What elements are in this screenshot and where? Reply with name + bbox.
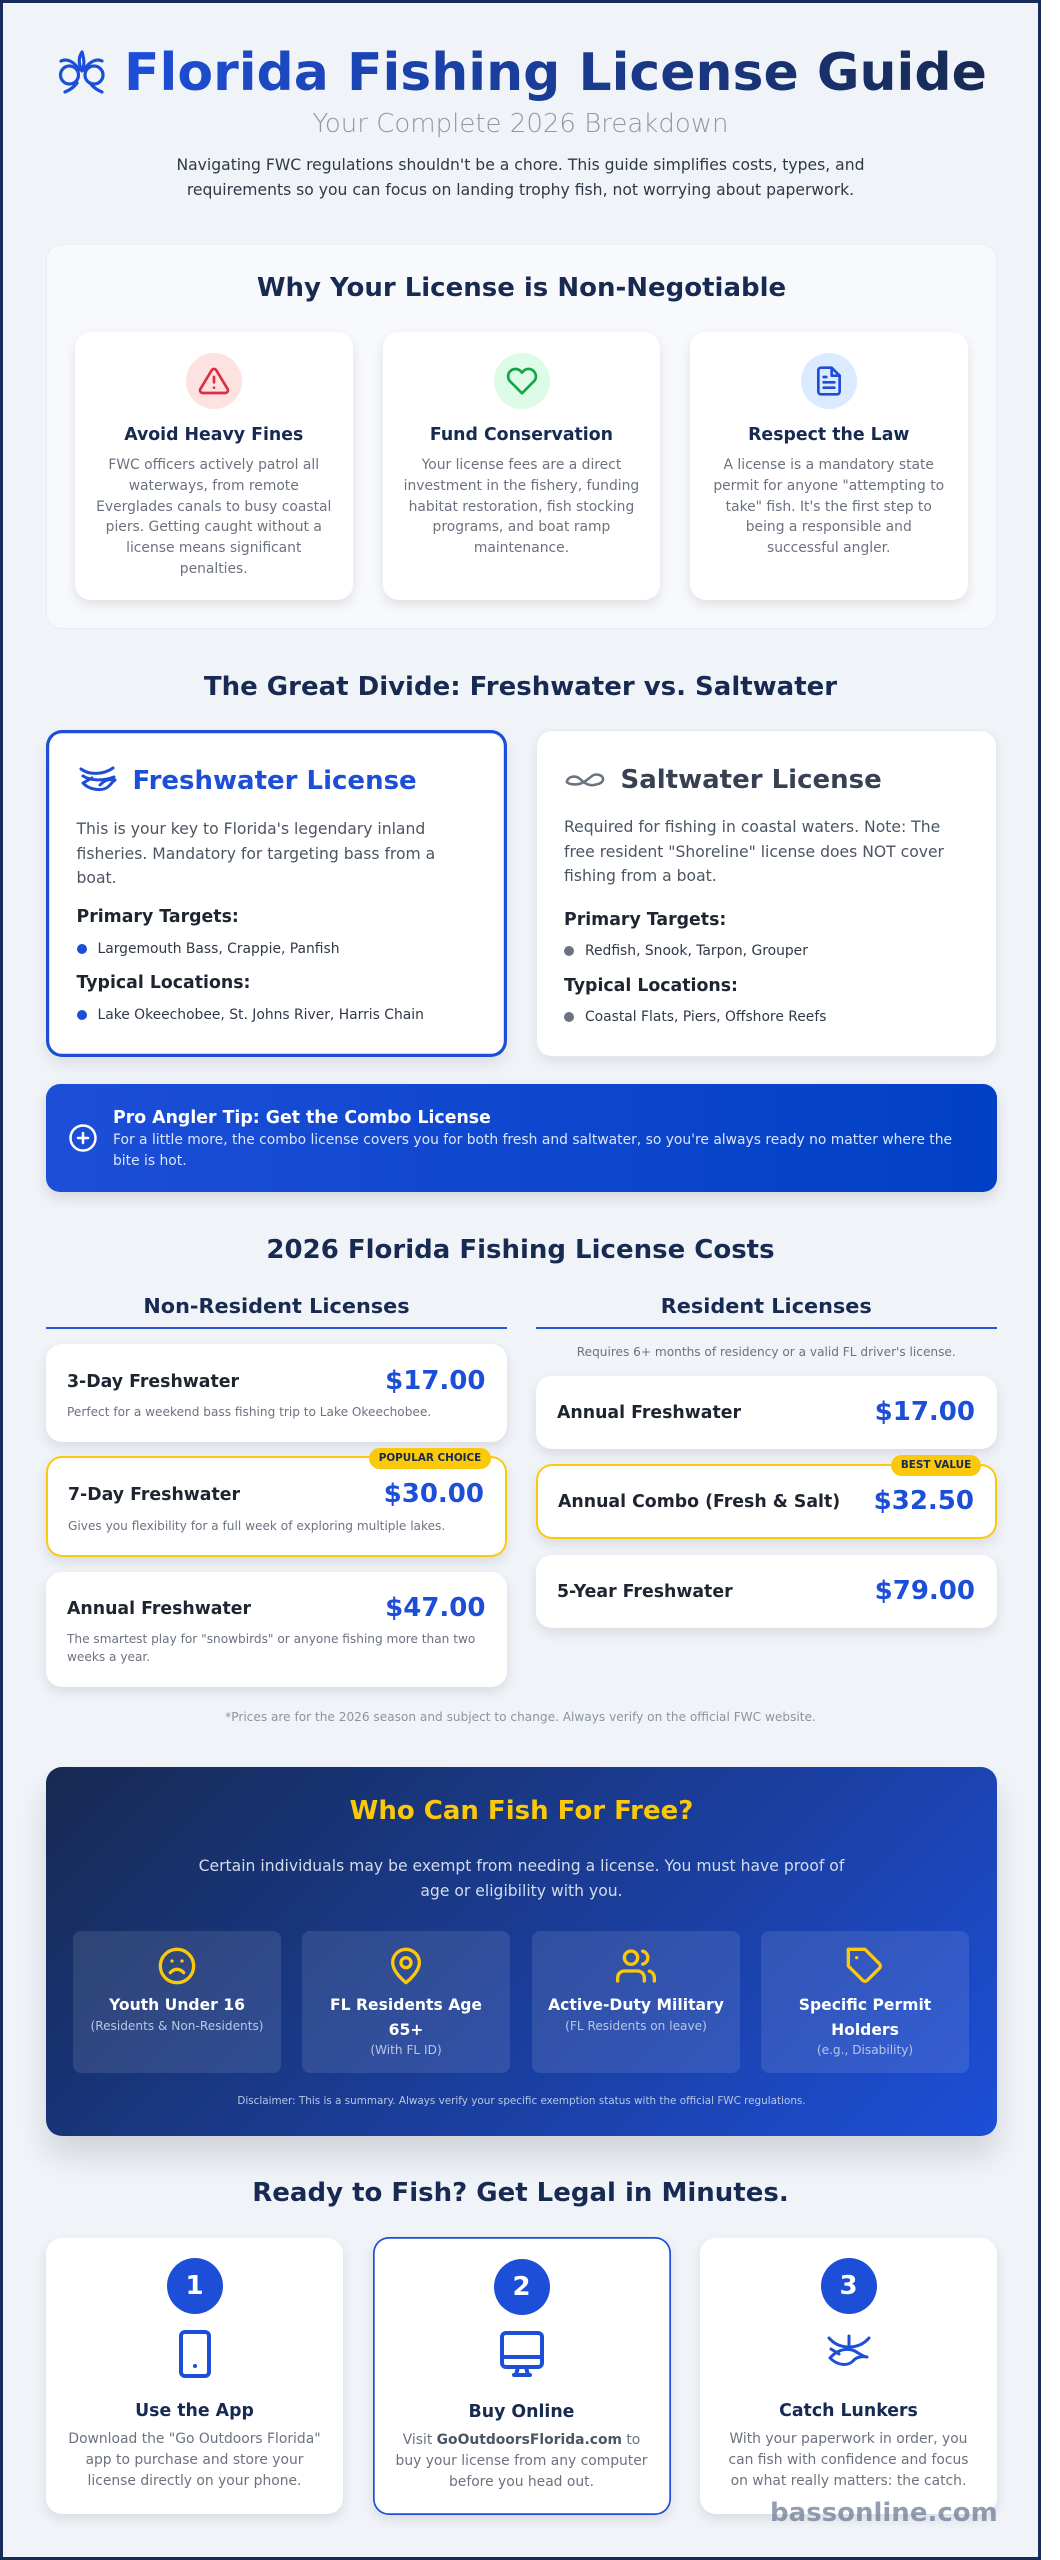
item title: FL Residents Age	[330, 1996, 482, 2014]
icon: plus circle	[69, 1124, 97, 1152]
card text: penalties.	[180, 561, 248, 577]
typical locations label: Typical Locations:	[76, 973, 250, 993]
step text: license directly on your phone.	[88, 2473, 301, 2489]
card text: piers. Getting caught without a	[106, 519, 322, 535]
price card: 5-year	[536, 1555, 997, 1628]
price: $17.00	[385, 1366, 486, 1396]
price card: annual	[536, 1376, 997, 1449]
intro text	[176, 156, 865, 199]
item note: (e.g., Disability)	[817, 2043, 913, 2057]
step number: 2	[512, 2272, 531, 2302]
step number	[494, 2259, 550, 2315]
panel: saltwater license	[536, 730, 997, 1057]
step text	[728, 2431, 968, 2489]
panel intro: age or eligibility with you.	[420, 1882, 623, 1900]
step text: before you head out.	[449, 2474, 594, 2490]
panel: who can fish for free	[46, 1767, 997, 2136]
card text: investment in the fishery, funding	[404, 478, 639, 494]
description	[66, 1632, 475, 1664]
targets list: Redfish, Snook, Tarpon, Grouper	[585, 943, 808, 959]
badge	[369, 1448, 491, 1469]
step number: 3	[839, 2271, 858, 2301]
card title: Respect the Law	[748, 425, 909, 445]
card text: waterways, from remote	[129, 478, 299, 494]
step title: Use the App	[135, 2401, 254, 2421]
item title: Youth Under 16	[109, 1996, 245, 2014]
icon: face	[158, 1948, 196, 1984]
price: $30.00	[384, 1479, 484, 1509]
callout: pro angler tip	[46, 1084, 997, 1192]
card: respect the law	[690, 332, 968, 600]
description	[76, 820, 435, 887]
panel intro	[199, 1857, 845, 1900]
panel intro: Certain individuals may be exempt from needing a license. You must have proof of	[199, 1857, 844, 1875]
badge: BEST VALUE	[901, 1459, 971, 1471]
disclaimer: Disclaimer: This is a summary. Always verify your specific exemption status with the official FWC regulations.	[237, 2095, 806, 2107]
card text: A license is a mandatory state	[724, 457, 934, 473]
bullet dot	[564, 946, 574, 956]
step number	[820, 2258, 876, 2314]
card text: being a responsible and	[746, 519, 912, 535]
description: This is your key to Florida's legendary inland	[76, 820, 425, 838]
step title: Catch Lunkers	[779, 2401, 918, 2421]
item note: (With FL ID)	[370, 2043, 442, 2057]
panel: freshwater license	[46, 730, 507, 1057]
badge	[891, 1455, 981, 1476]
bullet dot	[77, 1010, 87, 1020]
price: $32.50	[874, 1486, 974, 1516]
card text: license means significant	[126, 540, 301, 556]
panel: why your license is non-negotiable	[46, 244, 997, 629]
subtitle: Your Complete 2026 Breakdown	[312, 109, 729, 139]
heading: ready to fish: Ready to Fish? Get Legal in Minutes.	[252, 2178, 789, 2208]
card title: Avoid Heavy Fines	[124, 425, 303, 445]
step text	[68, 2431, 321, 2489]
underline	[46, 1327, 507, 1329]
step number: 1	[185, 2271, 204, 2301]
primary targets label: Primary Targets:	[76, 907, 239, 927]
bullet dot	[77, 944, 87, 954]
step title: Buy Online	[469, 2402, 574, 2422]
icon: tag	[846, 1948, 882, 1983]
name: 5-Year Freshwater	[557, 1582, 733, 1602]
card text: Everglades canals to busy coastal	[96, 499, 331, 515]
description: Perfect for a weekend bass fishing trip to Lake Okeechobee.	[67, 1405, 431, 1419]
column: non-resident licenses	[44, 1294, 510, 1694]
targets list: Largemouth Bass, Crappie, Panfish	[98, 941, 340, 957]
residency note: Requires 6+ months of residency or a valid FL driver's license.	[577, 1345, 956, 1359]
card text: take" fish. It's the first step to	[726, 499, 932, 515]
locations list: Lake Okeechobee, St. Johns River, Harris Chain	[98, 1007, 424, 1023]
title: Florida Fishing License Guide	[124, 43, 987, 103]
item note: (FL Residents on leave)	[565, 2019, 707, 2033]
price card: annual combo	[536, 1464, 997, 1539]
bullet dot	[564, 1012, 574, 1022]
name: Annual Freshwater	[67, 1599, 251, 1619]
icon: freshwater fish	[79, 766, 117, 792]
item title	[799, 1996, 931, 2039]
step 2: buy online	[372, 2237, 670, 2515]
column heading: Non-Resident Licenses	[143, 1294, 410, 1318]
icon: fish logo	[58, 50, 105, 94]
primary targets label: Primary Targets:	[564, 910, 726, 930]
description	[564, 818, 944, 885]
description: Gives you flexibility for a full week of exploring multiple lakes.	[68, 1519, 445, 1533]
card text	[404, 457, 639, 556]
icon: computer	[500, 2331, 544, 2377]
locations list: Coastal Flats, Piers, Offshore Reefs	[585, 1009, 826, 1025]
badge: POPULAR CHOICE	[379, 1452, 481, 1464]
step text: on what really matters: the catch.	[731, 2473, 966, 2489]
description: The smartest play for "snowbirds" or anyone fishing more than two	[67, 1632, 475, 1646]
card text	[713, 457, 944, 556]
item title: Active-Duty Military	[548, 1996, 724, 2014]
card text: Your license fees are a direct	[422, 457, 621, 473]
price: $79.00	[875, 1576, 975, 1606]
name: 3-Day Freshwater	[67, 1372, 239, 1392]
item title: Holders	[831, 2021, 899, 2039]
typical locations label: Typical Locations:	[564, 976, 738, 996]
step text: app to purchase and store your	[86, 2452, 303, 2468]
item: youth	[73, 1931, 281, 2073]
card: fund conservation	[383, 332, 660, 600]
footnote: *Prices are for the 2026 season and subject to change. Always verify on the official FWC website.	[225, 1710, 816, 1724]
heading: license costs: 2026 Florida Fishing License Costs	[266, 1235, 775, 1265]
icon: location pin	[391, 1948, 421, 1984]
price: $17.00	[875, 1397, 975, 1427]
icon: phone	[179, 2330, 211, 2378]
card text: maintenance.	[474, 540, 569, 556]
price card: 7-day popular	[46, 1456, 507, 1557]
item title: 65+	[389, 2021, 423, 2039]
item: permit holders	[761, 1931, 969, 2073]
name: Annual Freshwater	[557, 1403, 741, 1423]
panel heading: Who Can Fish For Free?	[350, 1796, 693, 1826]
name: Annual Combo (Fresh & Salt)	[558, 1492, 840, 1512]
icon: people	[616, 1949, 656, 1983]
icon: warning	[186, 353, 242, 409]
panel title: Freshwater License	[132, 766, 417, 796]
step 1: use the app	[46, 2238, 343, 2514]
column: resident licenses	[534, 1294, 1000, 1636]
price: $47.00	[385, 1593, 486, 1623]
card text	[96, 457, 331, 577]
description: free resident "Shoreline" license does NOT cover	[564, 842, 944, 860]
price card: 3-day	[46, 1344, 507, 1442]
step text: Download the "Go Outdoors Florida"	[68, 2431, 321, 2447]
column heading: Resident Licenses	[661, 1294, 872, 1318]
card: avoid heavy fines	[75, 332, 352, 600]
item: military	[532, 1931, 740, 2073]
intro text: requirements so you can focus on landing trophy fish, not worrying about paperwork.	[187, 181, 854, 199]
card text: habitat restoration, fish stocking	[409, 499, 634, 515]
card text: FWC officers actively patrol all	[108, 457, 319, 473]
step number	[166, 2258, 222, 2314]
card text: programs, and boat ramp	[433, 519, 610, 535]
watermark: bassonline.com	[770, 2498, 998, 2528]
card title: Fund Conservation	[430, 425, 613, 445]
icon: document	[801, 353, 857, 409]
heading: Why Your License is Non-Negotiable	[257, 273, 786, 303]
tip text: For a little more, the combo license covers you for both fresh and saltwater, so you're always ready no matter where the	[113, 1132, 952, 1148]
card text: successful angler.	[767, 540, 890, 556]
tip text	[113, 1132, 952, 1169]
step text: With your paperwork in order, you	[730, 2431, 967, 2447]
item title: Specific Permit	[799, 1996, 931, 2014]
step 3: catch lunkers	[700, 2238, 997, 2514]
icon: heart	[494, 353, 550, 409]
heading: the great divide: The Great Divide: Freshwater vs. Saltwater	[204, 672, 837, 702]
item title	[330, 1996, 482, 2039]
item: seniors	[302, 1931, 510, 2073]
description: fishing from a boat.	[564, 867, 717, 885]
step text	[396, 2432, 648, 2490]
intro text: Navigating FWC regulations shouldn't be a chore. This guide simplifies costs, types, and	[176, 156, 865, 174]
name: 7-Day Freshwater	[68, 1485, 240, 1505]
step text: can fish with confidence and focus	[728, 2452, 968, 2468]
step text: buy your license from any computer	[396, 2453, 647, 2469]
card text: permit for anyone "attempting to	[713, 478, 944, 494]
tip text: bite is hot.	[113, 1153, 187, 1169]
tip title: Pro Angler Tip: Get the Combo License	[113, 1108, 491, 1128]
description: weeks a year.	[67, 1650, 150, 1664]
description: boat.	[76, 869, 117, 887]
description: fisheries. Mandatory for targeting bass from a	[76, 844, 435, 862]
icon: fish	[827, 2334, 871, 2366]
panel title: Saltwater License	[620, 765, 882, 795]
price card: annual	[46, 1572, 507, 1687]
step text: Visit GoOutdoorsFlorida.com to	[403, 2432, 640, 2448]
icon: saltwater wave	[566, 773, 604, 786]
description: Required for fishing in coastal waters. Note: The	[564, 818, 940, 836]
underline	[536, 1327, 997, 1329]
item note: (Residents & Non-Residents)	[90, 2019, 264, 2033]
header	[58, 43, 987, 199]
